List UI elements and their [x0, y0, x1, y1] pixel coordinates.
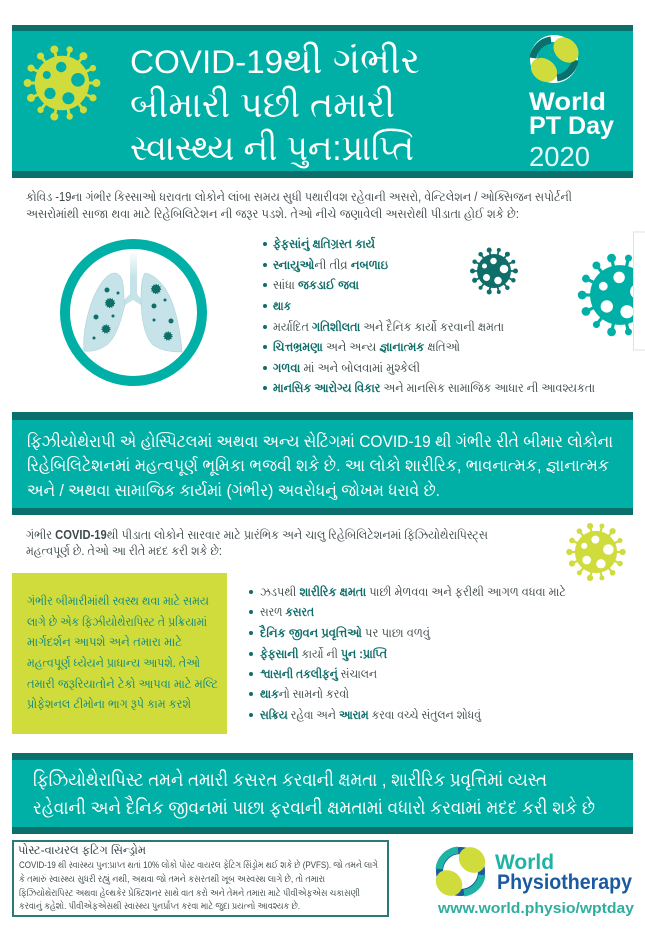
title: સ્વાસ્થ્ય ની પુન:પ્રાપ્તિ — [130, 127, 414, 169]
url: www.world.physio/wptday — [437, 900, 635, 917]
list: effects of severe illness: ગળવા માં અને બોલવામાં મુશ્કેલી — [273, 360, 420, 375]
list: how physiotherapists help: દૈનિક જીવન પ્રવૃત્તિઓ પર પાછા વળવું — [258, 623, 431, 641]
list: effects of severe illness: ચિત્તભ્રમણા અને અન્ય જ્ઞાનાત્મક ક્ષતિઓ — [273, 338, 461, 354]
intro text — [26, 189, 572, 221]
list: effects of severe illness: સ્નાયુઓની તીવ્ર નબળાઇ — [273, 256, 389, 273]
paragraph: physiotherapists are important: ગંભીર COVID-19થી પીડાતા લોકોને સારવાર માટે પ્રારંભિક અને ચાલુ રિહેબિલિટેશનમાં ફિઝિયોથેરાપિસ્ટ્સ — [26, 527, 489, 543]
banner: role of physiotherapy — [12, 412, 633, 515]
panel: post-viral fatigue syndrome: COVID-19 થી સ્વાસ્થ્ય પુન:પ્રાપ્ત થતાં 10% લોકો પોસ્ટ વાયરલ ફેટિગ સિંડ્રોમ થઈ શકે છે (PVFS). જો તમને લાગે — [19, 858, 378, 871]
panel: lime recovery note: પ્રોફેશનલ ટીમોના ભાગ રૂપે કામ કરશે — [27, 696, 191, 711]
panel: post-viral fatigue syndrome: કે તમારું સ્વાસ્થ્ય સુધરી રહ્યું નથી, અથવા જો તમને કસરતથી ખૂબ અસ્વસ્થ લાગે છે, તો તમારા — [19, 872, 326, 885]
banner: role of physiotherapy: અને / અથવા સામાજિક કાર્યમાં (ગંભીર) અવરોધનું જોખમ ધરાવે છે. — [27, 480, 440, 500]
list: how physiotherapists help: સક્રિય રહેવા અને આરામ કરવા વચ્ચે સંતુલન શોધવું — [260, 706, 482, 722]
title: COVID-19થી ગંભીર — [130, 40, 420, 81]
intro text: અસરોમાંથી સાજા થવા માટે રિહેબિલિટેશન ની જરૂર પડશે. તેઓ નીચે જણાવેલી અસરોથી પીડાતા હોઈ શકે છે: — [26, 206, 519, 221]
icon: lungs in circle — [65, 244, 202, 381]
banner: physiotherapist can help: ફિઝિયોથેરાપિસ્ટ તમને તમારી કસરત કરવાની ક્ષમતા , શારીરિક પ્રવૃત્તિમાં વ્યસ્ત — [33, 769, 547, 791]
title: બીમારી પછી તમારી — [130, 84, 395, 125]
list: effects of severe illness: ફેફસાંનું ક્ષતિગ્રસ્ત કાર્ય — [273, 235, 376, 252]
panel: lime recovery note — [12, 573, 227, 734]
logo: World PT Day 2020: World — [529, 88, 606, 116]
banner: role of physiotherapy: રિહેબિલિટેશનમાં મહત્વપૂર્ણ ભૂમિકા ભજવી શકે છે. આ લોકો શારીરિક, ભાવનાત્મક, જ્ઞાનાત્મક — [27, 455, 609, 475]
heading: post-viral fatigue syndrome: પોસ્ટ-વાયરલ ફટિગ સિન્ડ્રોમ — [18, 843, 146, 857]
icon: teal virus clipped at edge — [578, 254, 633, 336]
panel: lime recovery note: તમારી જરૂરિયાતોને ટેકો આપવા માટે મલ્ટિ — [27, 676, 219, 691]
list: effects of severe illness: મર્યાદિત ગતિશીલતા અને દૈનિક કાર્યો કરવાની ક્ષમતા — [273, 318, 504, 334]
icon: lime virus in header — [24, 45, 100, 121]
panel: lime recovery note: મહત્વપૂર્ણ ધ્યેયને પ્રાધાન્ય આપશે. તેઓ — [27, 655, 201, 671]
logo: World PT Day 2020: PT Day — [529, 112, 614, 140]
list: how physiotherapists help: થાકનો સામનો કરવો — [260, 686, 349, 701]
logo: World PT Day 2020: 2020 — [529, 141, 590, 172]
logo: World Physiotherapy — [431, 842, 635, 917]
list: how physiotherapists help: સરળ કસરત — [260, 605, 315, 619]
list: effects of severe illness: માનસિક આરોગ્ય વિકાર અને માનસિક સામાજિક આધાર ની આવશ્યકતા — [273, 379, 595, 395]
paragraph: physiotherapists are important: મહત્વપૂર્ણ છે. તેઓ આ રીતે મદદ કરી શકે છે: — [26, 543, 222, 559]
banner: physiotherapist can help: રહેવાની અને દૈનિક જીવનમાં પાછા ફરવાની ક્ષમતામાં વધારો કરવામાં મદદ કરી શકે છે — [33, 796, 595, 819]
logo: World Physiotherapy: Physiotherapy — [497, 871, 632, 894]
logo: World Physiotherapy: World — [495, 851, 554, 874]
banner: physiotherapist can help — [12, 753, 633, 834]
panel: lime recovery note: માર્ગદર્શન આપશે અને તમારા માટે — [27, 634, 183, 649]
list: how physiotherapists help — [249, 583, 567, 722]
list: how physiotherapists help: શ્વાસની તકલીફનું સંચાલન — [260, 665, 378, 682]
header banner — [12, 25, 633, 178]
icon: lime virus — [566, 523, 626, 581]
panel: lime recovery note: ગંભીર બીમારીમાંથી સ્વસ્થ થવા માટે સમય — [27, 593, 210, 608]
panel: post-viral fatigue syndrome — [13, 841, 388, 916]
panel: lime recovery note: લાગે છે એક ફિઝીયોથેરાપિસ્ટ તે પ્રક્રિયામાં — [27, 614, 207, 629]
list: effects of severe illness — [263, 235, 595, 395]
list: how physiotherapists help: ફેફસાની કાર્યો ની પુન :પ્રાપ્તિ — [260, 645, 388, 662]
panel: post-viral fatigue syndrome: ફિઝિયોથેરાપિસ્ટ અથવા હેલ્થકેર પ્રેક્ટિશનર સાથે વાત કરો અને તેમને તમારા માટે પીવીએફએસ ચકાસણી — [19, 886, 360, 899]
panel: post-viral fatigue syndrome: કરવાનું કહેશો. પીવીએફએસથી સ્વાસ્થ્ય પુનર્પ્રાપ્ત કરવા માટે જુદા પ્રયત્નો આવશ્યક છે. — [19, 899, 300, 912]
list: effects of severe illness: થાક — [273, 299, 292, 313]
title — [130, 40, 420, 169]
paragraph: physiotherapists are important — [26, 527, 489, 559]
intro text: કોવિડ -19ના ગંભીર કિસ્સાઓ ધરાવતા લોકોને લાંબા સમય સુધી પથારીવશ રહેવાની અસરો, વેન્ટિલેશન / ઓક્સિજન સપોર્ટની — [26, 189, 572, 204]
icon: dark teal virus — [470, 248, 518, 294]
logo: World PT Day 2020 — [526, 32, 614, 172]
list: effects of severe illness: સાંધા જકડાઈ જવા — [273, 276, 359, 292]
list: how physiotherapists help: ઝડપથી શારીરિક ક્ષમતા પાછી મેળવવા અને ફરીથી આગળ વધવા માટે — [260, 583, 567, 599]
